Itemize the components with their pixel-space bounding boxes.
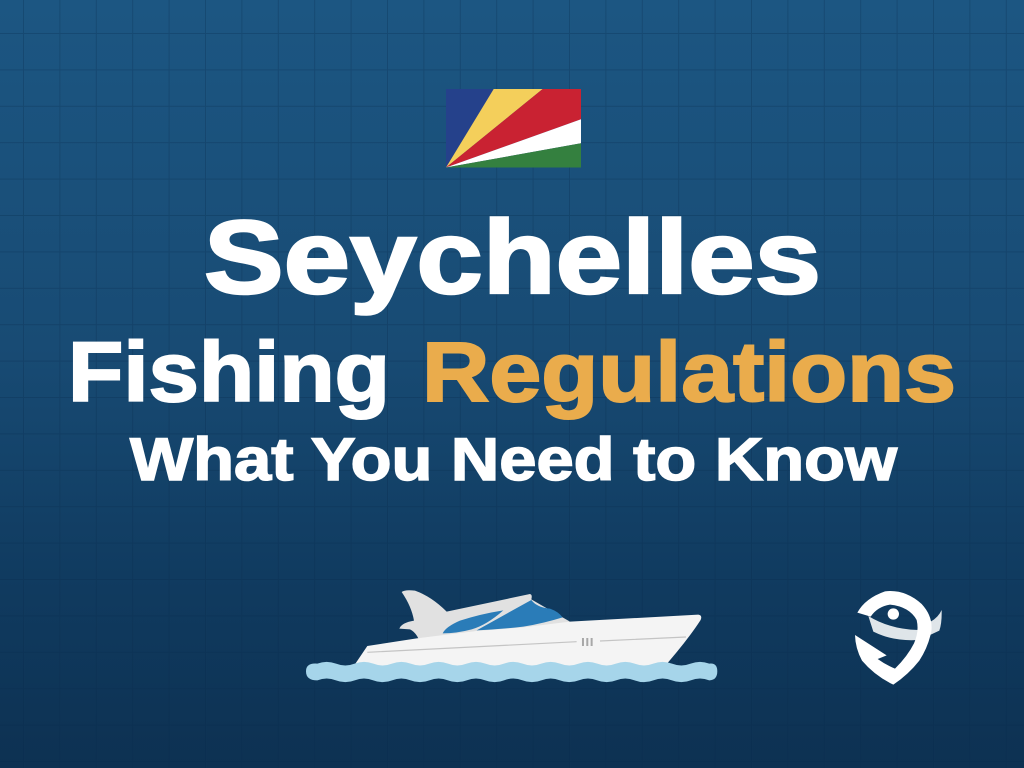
- hull vents: [583, 638, 592, 646]
- logo body: [855, 591, 932, 685]
- subtitle: What You Need to Know: What You Need to Know: [130, 426, 897, 493]
- title: Seychelles: Seychelles: [204, 200, 821, 316]
- hull stripe: [367, 637, 686, 652]
- icon: Seychelles flag: [446, 89, 581, 168]
- logo tail band: [868, 610, 942, 640]
- water waves: [306, 662, 717, 682]
- boat superstructure: [399, 590, 570, 640]
- icon: fish hook logo: [855, 591, 942, 685]
- logo eye: [888, 608, 899, 620]
- heading: Fishing Regulations: Fishing: [68, 325, 390, 419]
- heading: Fishing Regulations: Regulations: [422, 325, 956, 419]
- illustration: motor yacht on waves: [306, 590, 717, 682]
- heading: Fishing Regulations: [68, 325, 956, 419]
- boat hull: [350, 615, 701, 672]
- boat windows: [443, 610, 503, 633]
